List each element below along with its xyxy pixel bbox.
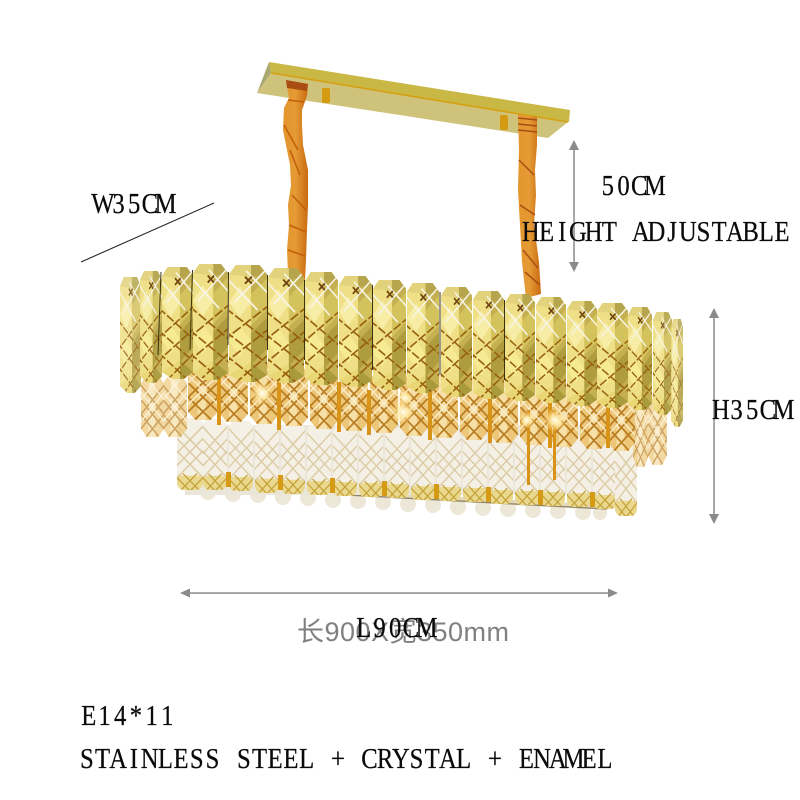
label: original gray size note: 长900X宽350mm xyxy=(297,617,509,647)
gold lattice panel ring xyxy=(118,264,684,427)
lower crystal tier xyxy=(173,418,640,527)
label: height adjustable: HEIGHT ADJUSTABLE xyxy=(522,215,790,247)
arrow: body height xyxy=(709,308,719,524)
arrow: suspension height xyxy=(569,140,579,272)
left suspension chain cover xyxy=(283,80,308,280)
label: drop length: 50CM xyxy=(602,169,666,201)
chandelier illustration xyxy=(118,62,684,527)
label: bulb specification: E14*11 xyxy=(81,699,174,731)
right suspension chain cover xyxy=(518,114,541,298)
beaded base tray xyxy=(195,483,610,520)
label: materials: STAINLESS STEEL + CRYSTAL + ENAMEL xyxy=(80,742,612,774)
arrow: length xyxy=(180,588,618,598)
upper crystal tier xyxy=(138,350,670,485)
glowing bulbs xyxy=(250,381,567,432)
label: body height: H35CM xyxy=(712,393,795,425)
label: length: L90CM xyxy=(356,611,438,643)
ceiling canopy xyxy=(257,62,570,138)
label: width: W35CM xyxy=(91,187,177,219)
width indicator line xyxy=(81,203,214,262)
